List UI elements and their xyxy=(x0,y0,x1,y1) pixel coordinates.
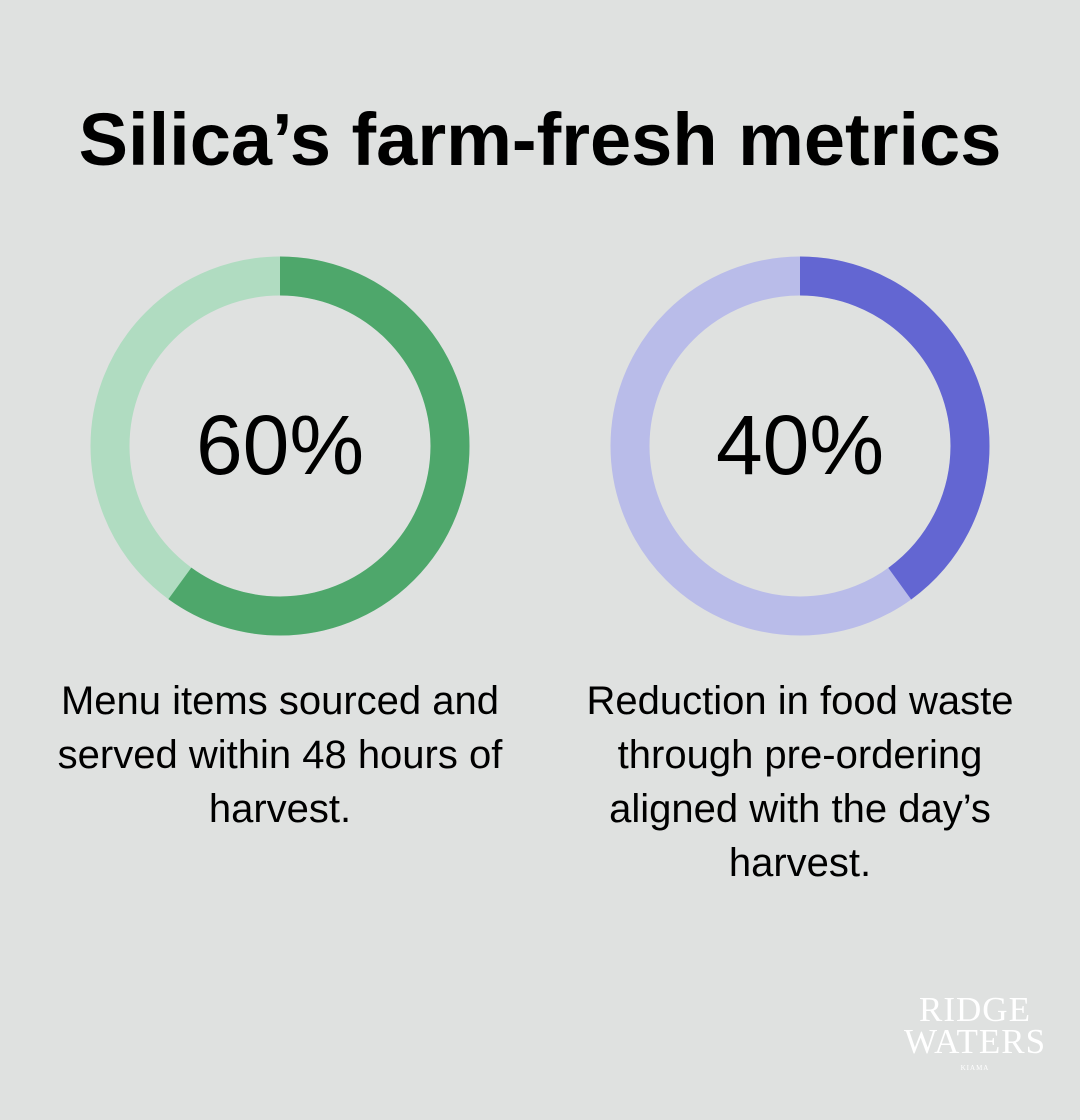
logo xyxy=(904,990,1046,1072)
donut chart: 60% xyxy=(90,256,470,636)
logo: RIDGE xyxy=(919,990,1031,1029)
description: left: Menu items sourced and served within 48 hours of harvest. xyxy=(58,679,502,831)
description: right: Reduction in food waste through pre-ordering aligned with the day’s harvest. xyxy=(587,679,1013,885)
title: Silica’s farm-fresh metrics xyxy=(79,98,1001,181)
donut chart: 40% xyxy=(610,256,990,636)
logo: WATERS xyxy=(904,1022,1046,1061)
stat: 60%: 60% xyxy=(196,398,364,492)
stat: 40%: 40% xyxy=(716,398,884,492)
logo: KIAMA xyxy=(961,1064,989,1072)
